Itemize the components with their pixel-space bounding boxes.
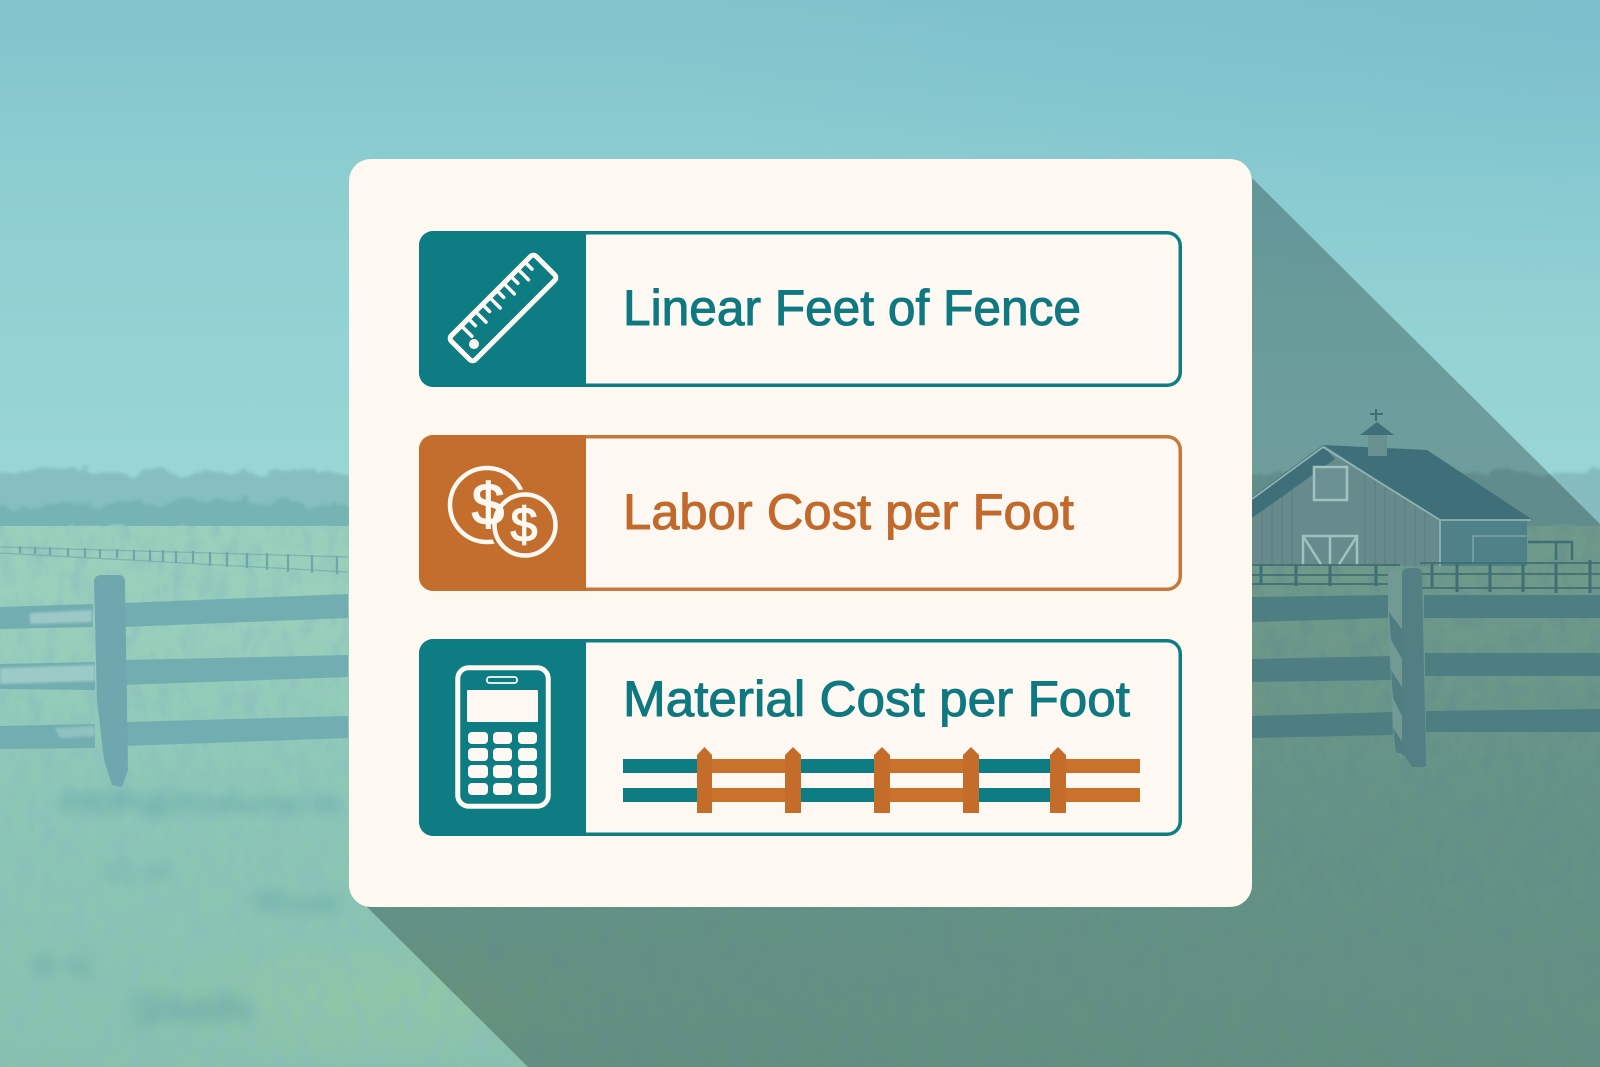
barn siding bbox=[1262, 470, 1425, 566]
row 3 outline bbox=[421, 641, 1180, 834]
barn roof bbox=[1323, 445, 1533, 520]
barn wing bbox=[1440, 520, 1527, 566]
icon: dollar coins bbox=[450, 468, 560, 560]
row 3 label: Material Cost per Foot bbox=[623, 671, 1130, 727]
row 2 outline bbox=[421, 437, 1180, 589]
barn wall bbox=[1252, 447, 1440, 566]
row 3 icon tile bbox=[419, 639, 586, 836]
long shadow of card bbox=[367, 177, 1600, 1067]
right foreground fence bbox=[1252, 568, 1600, 767]
icon: dollar coins: $ bbox=[472, 472, 504, 537]
row 1 label: Linear Feet of Fence bbox=[623, 280, 1081, 336]
corral gate bbox=[1528, 542, 1572, 560]
left fence bbox=[0, 575, 348, 787]
mid-distance fence bbox=[1252, 560, 1600, 593]
tree line on horizon bbox=[0, 470, 1600, 530]
dark grass tufts bbox=[30, 796, 340, 1022]
distant wire fence bbox=[0, 546, 348, 574]
row 2 icon tile bbox=[419, 435, 586, 591]
row 1: linear feet of fence bbox=[419, 231, 1180, 387]
barn window bbox=[1314, 467, 1347, 500]
gable trim bbox=[1252, 447, 1531, 566]
icon: ruler bbox=[449, 254, 557, 362]
grass texture bbox=[0, 526, 1600, 1067]
sky bbox=[0, 0, 1600, 530]
row 3: material cost per foot bbox=[419, 639, 1180, 836]
row 1 icon tile bbox=[419, 231, 586, 387]
row 1 outline bbox=[421, 233, 1180, 385]
icon: calculator bbox=[458, 668, 548, 806]
row 2 label: Labor Cost per Foot bbox=[623, 484, 1074, 540]
cupola bbox=[1360, 409, 1394, 456]
green grass patch bbox=[120, 933, 640, 1067]
fence illustration bbox=[623, 747, 1140, 813]
main card bbox=[349, 159, 1252, 907]
wing door bbox=[1472, 536, 1527, 564]
left roof overhang bbox=[1252, 445, 1335, 518]
field bbox=[0, 526, 1600, 1067]
barn in shadow bbox=[1252, 409, 1600, 593]
card panel bbox=[349, 159, 1252, 907]
row 2: labor cost per foot bbox=[419, 435, 1180, 591]
icon: dollar coins: $ bbox=[511, 499, 537, 552]
barn door bbox=[1303, 536, 1357, 566]
